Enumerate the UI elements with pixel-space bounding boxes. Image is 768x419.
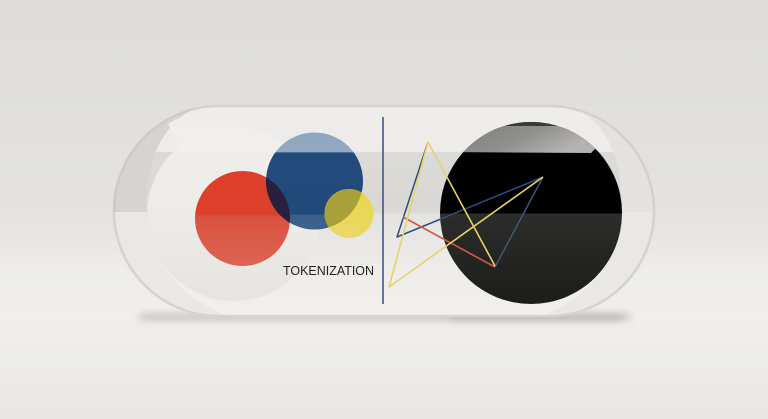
left cap lower light <box>115 212 146 214</box>
top dark sliver <box>504 122 558 126</box>
left highlight <box>168 118 180 128</box>
capsule glass body <box>113 105 655 317</box>
capsule outline <box>114 106 654 316</box>
yellow circle <box>324 189 374 238</box>
black circle <box>440 122 622 304</box>
faint blue line <box>495 177 543 267</box>
large pale circle <box>147 127 321 301</box>
label: TOKENIZATION: TOKENIZATION <box>283 264 374 278</box>
reflection band <box>464 126 596 153</box>
red line <box>403 217 495 267</box>
right cap lower light <box>622 212 653 214</box>
red circle <box>195 171 290 266</box>
left cap upper shade <box>131 108 194 152</box>
yellow and blue overlap <box>324 189 362 228</box>
blue circle <box>266 132 363 230</box>
top band highlight <box>172 108 597 126</box>
capsule <box>113 100 655 320</box>
geometric line figure <box>389 142 543 287</box>
vertical divider line <box>382 117 384 304</box>
yellow lines <box>389 142 543 287</box>
capsule inner shading <box>115 108 653 214</box>
black circle reflection <box>464 122 596 153</box>
blue lines <box>397 142 543 237</box>
right cap upper shade <box>599 126 652 212</box>
red and blue overlap <box>266 177 290 223</box>
floor shadow <box>140 314 630 320</box>
